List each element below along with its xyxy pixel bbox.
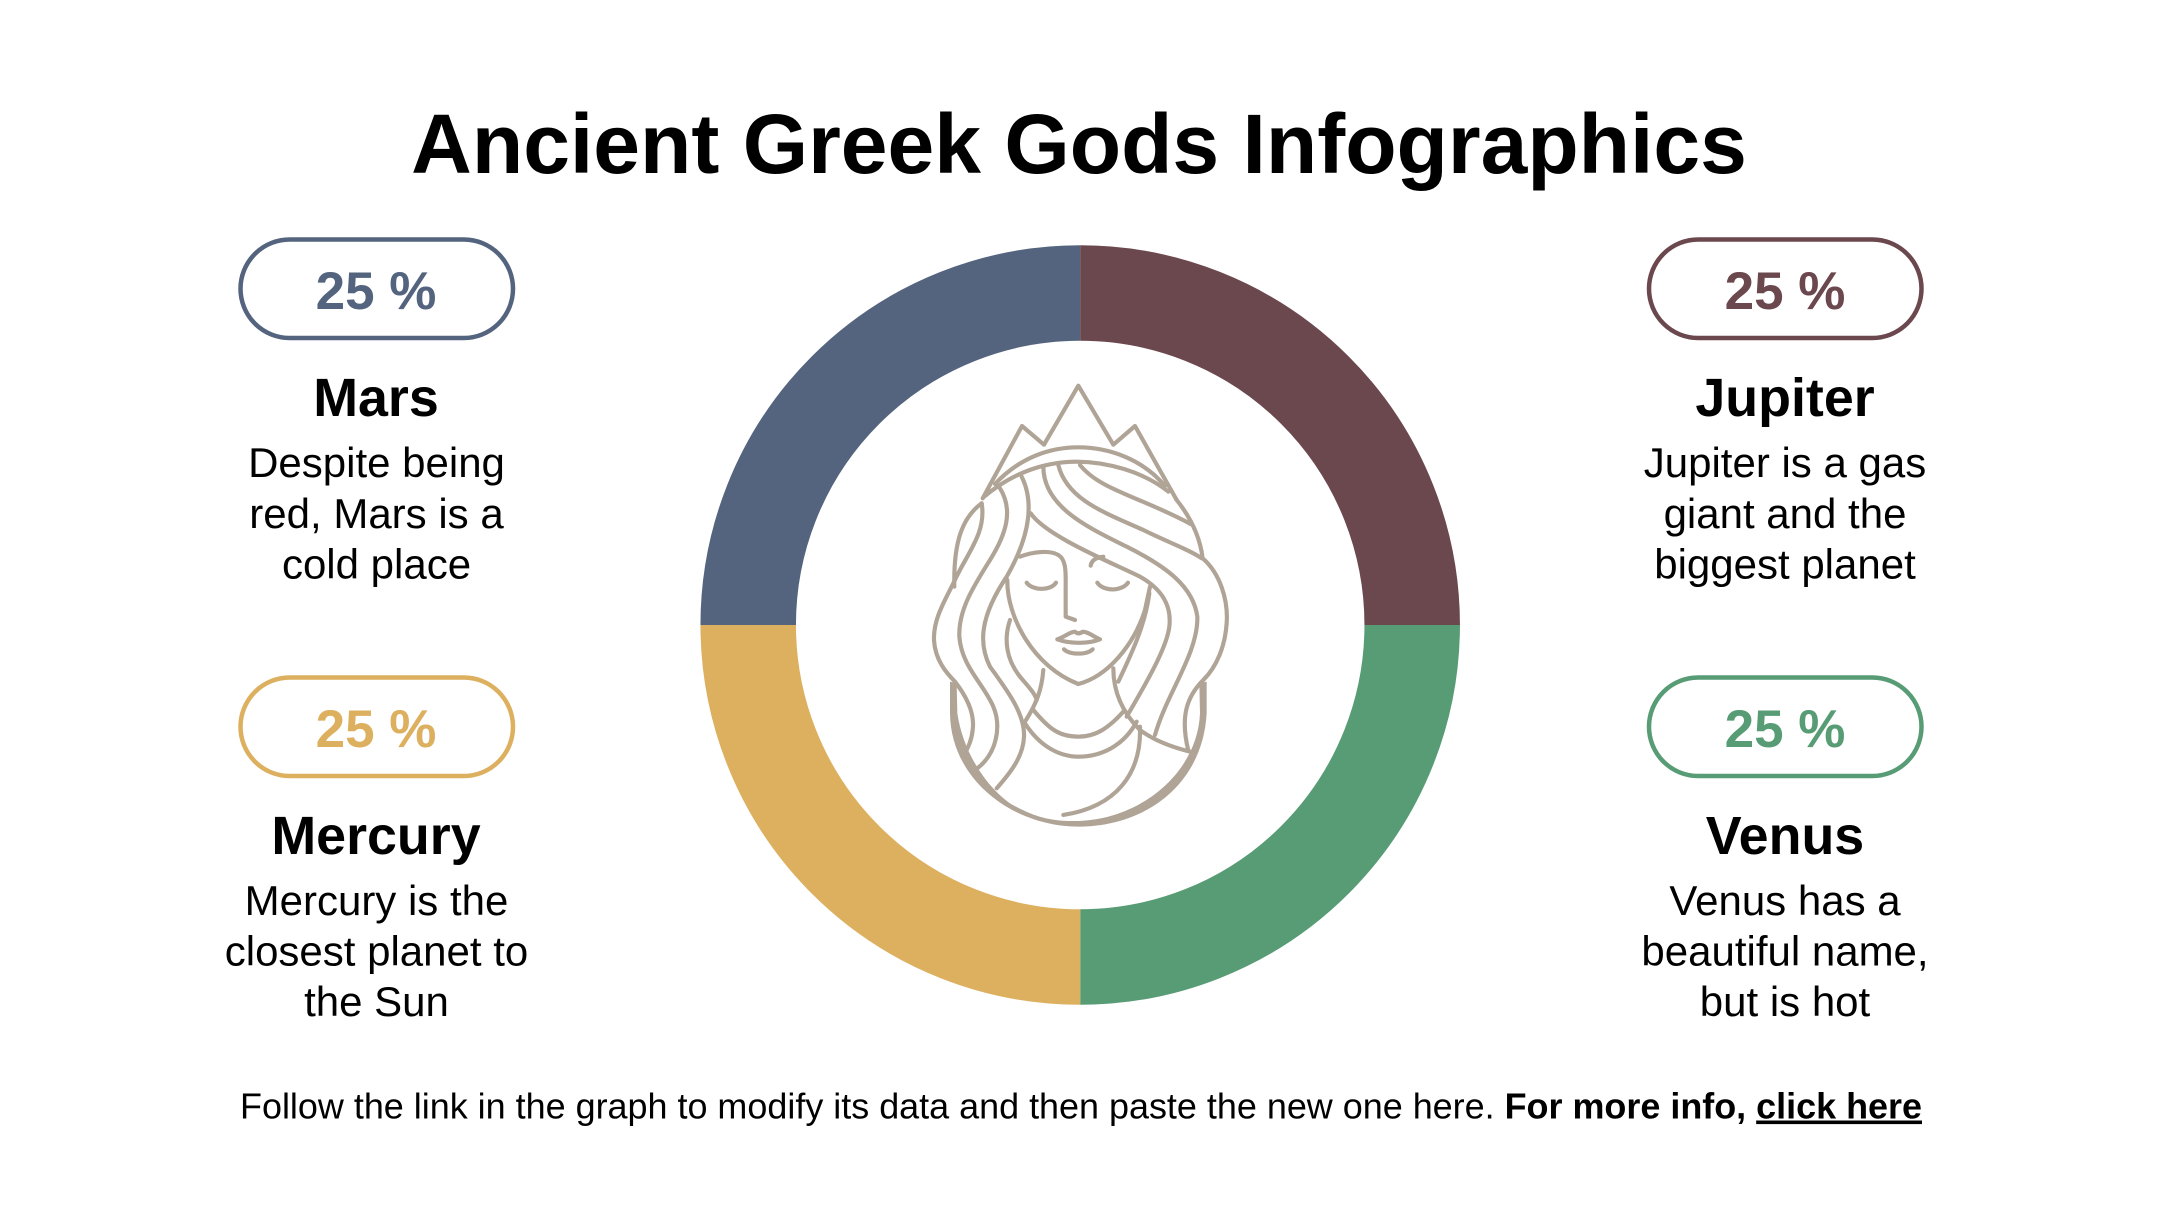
heading: Mars: Mars xyxy=(313,368,439,428)
block: Venus xyxy=(1641,678,1929,1025)
pill: Mars 25%: 25 % xyxy=(316,262,436,321)
heading: Venus: Venus xyxy=(1706,806,1864,866)
segment: Mars 25% xyxy=(748,293,1080,625)
text: Jupiter description: giant and the xyxy=(1664,490,1906,537)
text: Mars description: cold place xyxy=(282,541,471,588)
block: Mars xyxy=(240,240,513,588)
text: Mars description: Despite being xyxy=(248,439,505,486)
text: Jupiter description: biggest planet xyxy=(1654,541,1916,588)
text: Venus description: but is hot xyxy=(1700,978,1871,1025)
segment: Mercury 25% xyxy=(748,625,1080,957)
text: Mercury description: the Sun xyxy=(304,978,449,1025)
pill: Mars 25% xyxy=(240,240,513,338)
title: Ancient Greek Gods Infographics xyxy=(411,97,1747,191)
segment: Jupiter 25% xyxy=(1080,293,1412,625)
block: Mercury xyxy=(225,678,528,1025)
donut chart xyxy=(748,293,1412,957)
text: Venus description: Venus has a xyxy=(1669,877,1901,924)
segment: Venus 25% xyxy=(1080,625,1412,957)
text: Mars description: red, Mars is a xyxy=(249,490,504,537)
heading: Jupiter: Jupiter xyxy=(1695,368,1875,428)
footer note: Follow the link in the graph to modify its data and then paste the new one here. For more info, click here xyxy=(240,1086,1922,1126)
pill: Mercury 25%: 25 % xyxy=(316,700,436,759)
pill: Venus 25% xyxy=(1649,678,1922,776)
pill: Jupiter 25% xyxy=(1649,240,1922,338)
pill: Mercury 25% xyxy=(240,678,513,776)
pill: Venus 25%: 25 % xyxy=(1725,700,1845,759)
block: Jupiter xyxy=(1644,240,1926,588)
text: Jupiter description: Jupiter is a gas xyxy=(1644,439,1926,486)
heading: Mercury: Mercury xyxy=(271,806,481,866)
text: Venus description: beautiful name, xyxy=(1641,928,1929,975)
text: Mercury description: closest planet to xyxy=(225,928,528,975)
pill: Jupiter 25%: 25 % xyxy=(1725,262,1845,321)
icon: goddess with crown xyxy=(934,386,1227,827)
text: Mercury description: Mercury is the xyxy=(245,877,508,924)
